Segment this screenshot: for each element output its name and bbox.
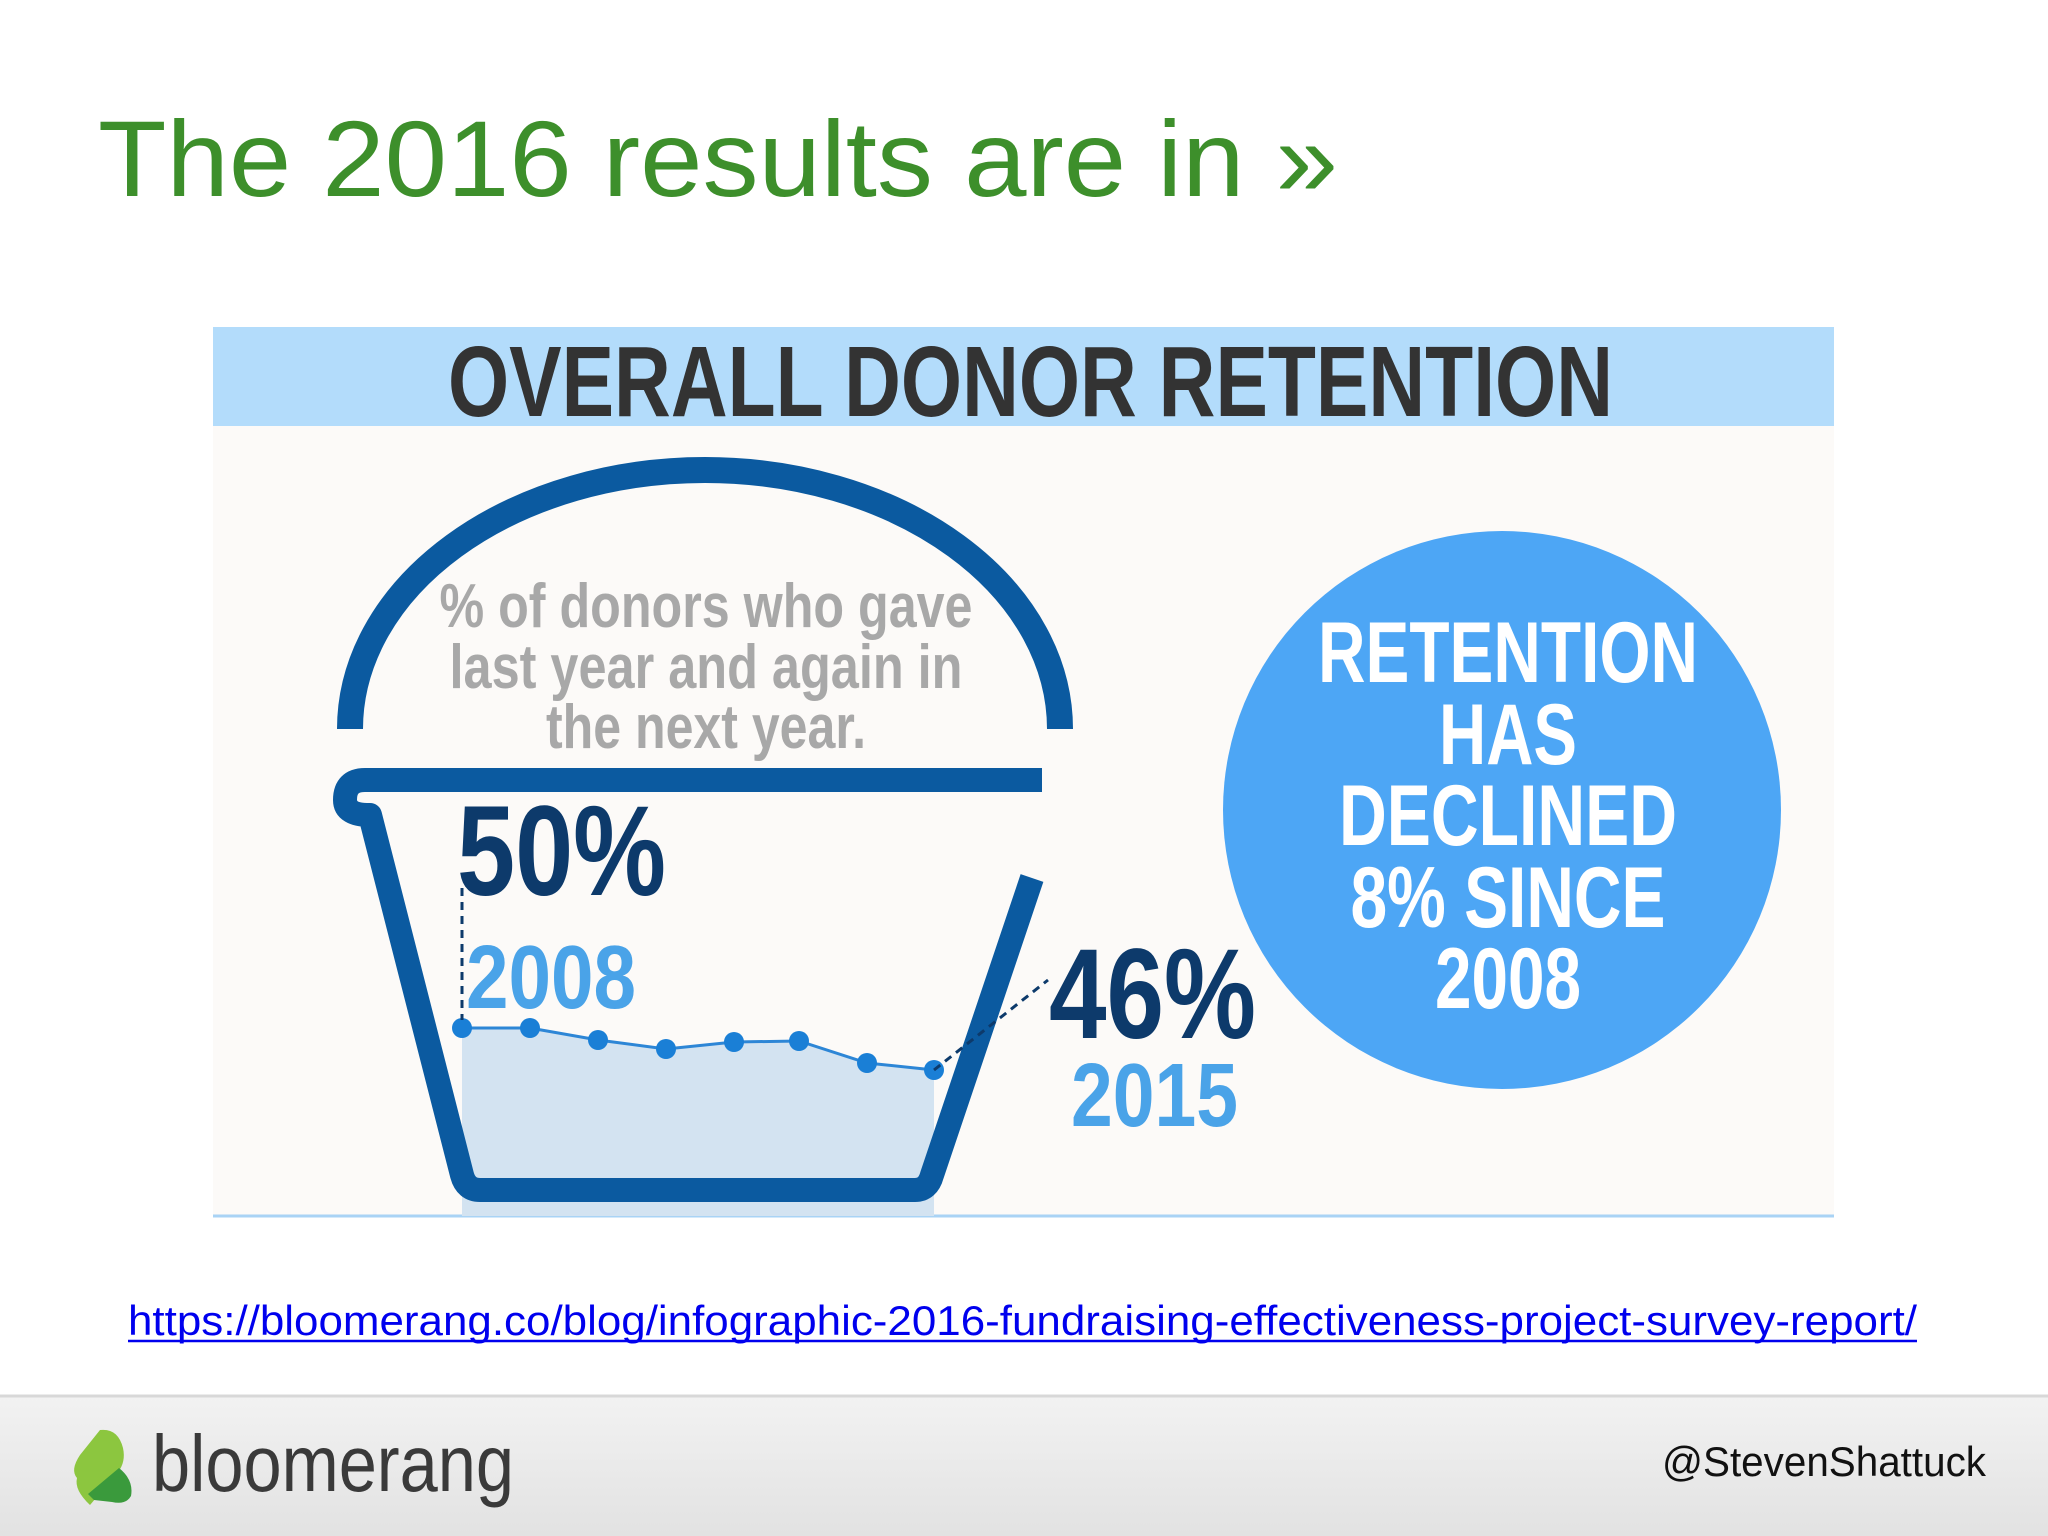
brand name: bloomerang <box>152 1419 514 1508</box>
bucket body <box>345 780 1042 1190</box>
label: 46% 2015 <box>1049 923 1256 1146</box>
label: 50% 2008: 50% <box>457 780 666 923</box>
label: 46% 2015: 2015 <box>1071 1046 1238 1146</box>
text: description: last year and again in <box>450 633 962 702</box>
footer <box>0 1395 2048 1536</box>
heading: OVERALL DONOR RETENTION <box>448 326 1613 438</box>
title: The 2016 results are in » <box>98 98 1338 219</box>
callout circle: 2008 <box>1435 931 1581 1027</box>
twitter handle: @StevenShattuck <box>1662 1438 1987 1485</box>
label: 50% 2008 <box>457 780 666 1028</box>
icon: bloomerang logo <box>74 1430 132 1505</box>
callout circle: 8% SINCE <box>1350 850 1666 946</box>
callout circle: DECLINED <box>1339 768 1677 864</box>
data line <box>452 888 1048 1080</box>
bucket handle <box>350 470 1060 729</box>
label: 46% 2015: 46% <box>1049 923 1256 1066</box>
source link: https://bloomerang.co/blog/infographic-2016-fundraising-effectiveness-project-survey-report/ <box>128 1297 1917 1344</box>
label: 50% 2008: 2008 <box>466 928 636 1028</box>
header band <box>213 326 1834 438</box>
text: description <box>440 572 972 762</box>
chart: bucket with retention line <box>345 470 1256 1216</box>
callout circle: HAS <box>1439 687 1577 783</box>
text: description: the next year. <box>546 693 866 762</box>
text: description: % of donors who gave <box>440 572 972 641</box>
callout circle <box>1223 531 1781 1089</box>
water fill <box>462 1028 934 1216</box>
panel: donor retention infographic <box>213 326 1834 1217</box>
callout circle: RETENTION <box>1318 605 1698 701</box>
